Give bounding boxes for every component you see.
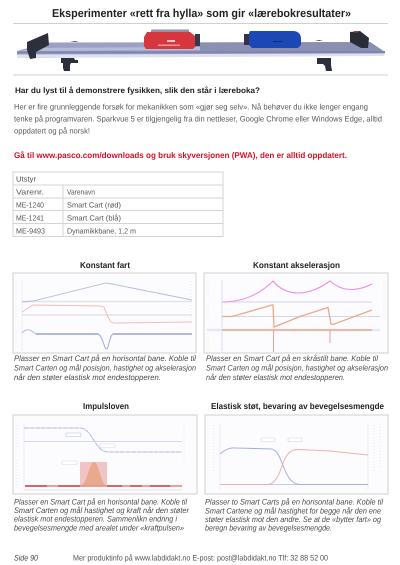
red call to action: Gå til www.pasco.com/downloads og bruk skyversjonen (PWA), den er alltid oppdatert.	[14, 150, 347, 160]
intro paragraph: oppdatert og på norsk!	[14, 126, 90, 136]
caption	[205, 498, 383, 532]
caption: Smart Carten og mål hastighet og kraft når den støter	[14, 506, 189, 515]
pulse area	[80, 462, 107, 486]
callout tags	[261, 438, 275, 442]
intro paragraph	[14, 102, 382, 136]
caption	[14, 498, 189, 532]
chart: position, velocity, acceleration	[13, 273, 196, 353]
caption: Smart Carten og mål posisjon, hastighet og akselerasjon	[14, 364, 196, 372]
caption: Plasser en Smart Cart på en skråstilt bane. Koble til	[206, 354, 378, 363]
track	[17, 42, 385, 58]
panel: konstant akselerasjon	[204, 260, 388, 382]
equipment table: ME-9493	[16, 226, 45, 236]
chart: velocity and force pulse	[13, 415, 197, 494]
equipment table: Smart Cart (rød)	[67, 200, 121, 210]
callout tags	[66, 433, 81, 436]
caption: Plasser en Smart Cart på en horisontal bane. Koble til	[14, 354, 196, 363]
red cart	[144, 30, 200, 49]
footer: Side 90	[14, 554, 38, 562]
right foot	[317, 58, 332, 71]
blue cart	[244, 31, 301, 48]
equipment table: ME-1241	[16, 214, 44, 222]
heading: Konstant akselerasjon	[253, 260, 340, 270]
title: Eksperimenter «rett fra hylla» som gir «lærebokresultater»	[52, 8, 351, 20]
caption: Plasser to Smart Carts på en horisontal bane. Koble til	[205, 498, 383, 506]
left foot	[61, 58, 78, 71]
caption: støter elastisk mot den andre. Se at de «bytter fart» og	[205, 515, 381, 524]
left end stop	[27, 33, 49, 59]
caption: beregn bevaring av bevegelsesmengde.	[205, 524, 332, 532]
heading: Elastisk støt, bevaring av bevegelsesmengde	[211, 401, 384, 411]
right end stop	[350, 31, 369, 48]
equipment table: Varenr.	[16, 188, 44, 196]
chart: position, velocity, acceleration on incline	[204, 273, 388, 353]
footer: Mer produktinfo på www.labdidakt.no E-post: post@labdidakt.no Tlf: 32 88 52 00	[73, 554, 328, 562]
equipment table	[13, 172, 223, 236]
caption: elastisk mot endestopperen. Sammenlikn endring i	[14, 514, 177, 524]
caption: når den støter elastisk mot endestopperen.	[206, 373, 345, 382]
intro heading: Har du lyst til å demonstrere fysikken, slik den står i læreboka?	[15, 86, 260, 95]
small track clips	[70, 40, 323, 42]
intro paragraph: Her er fire grunnleggende forsøk for mekanikken som «gjør seg selv». Nå behøver du ikke lenger engang	[14, 102, 368, 112]
caption: bevegelsesmengde med arealet under «kraftpulsen»	[14, 524, 184, 532]
caption: Smart Cartene og mål hastighet for begge når den ene	[205, 506, 381, 516]
panel: elastisk støt	[205, 401, 388, 532]
photo: dynamics track with red and blue smart carts	[17, 30, 385, 71]
caption: Plasser en Smart Cart på en horisontal bane. Koble til	[14, 498, 187, 506]
caption: når den støter elastisk mot endestopperen.	[14, 373, 161, 382]
equipment table: Dynamikkbane, 1,2 m	[67, 226, 136, 236]
panel: konstant fart	[13, 260, 196, 382]
equipment table: ME-1240	[16, 200, 44, 210]
heading: Impulsloven	[83, 401, 129, 411]
equipment table: Varenavn	[67, 188, 95, 196]
equipment table: Smart Cart (blå)	[67, 214, 122, 222]
chart: velocity of two carts	[205, 415, 388, 494]
equipment table: Utstyr	[16, 174, 37, 184]
intro paragraph: tenke på programvaren. Sparkvue 5 er tilgjengelig fra din nettleser, Google Chrome eller Windows Edge, alltid	[14, 114, 382, 124]
caption	[14, 354, 196, 382]
heading: Konstant fart	[80, 260, 130, 270]
caption	[206, 354, 388, 382]
panel: impulsloven	[13, 401, 197, 532]
